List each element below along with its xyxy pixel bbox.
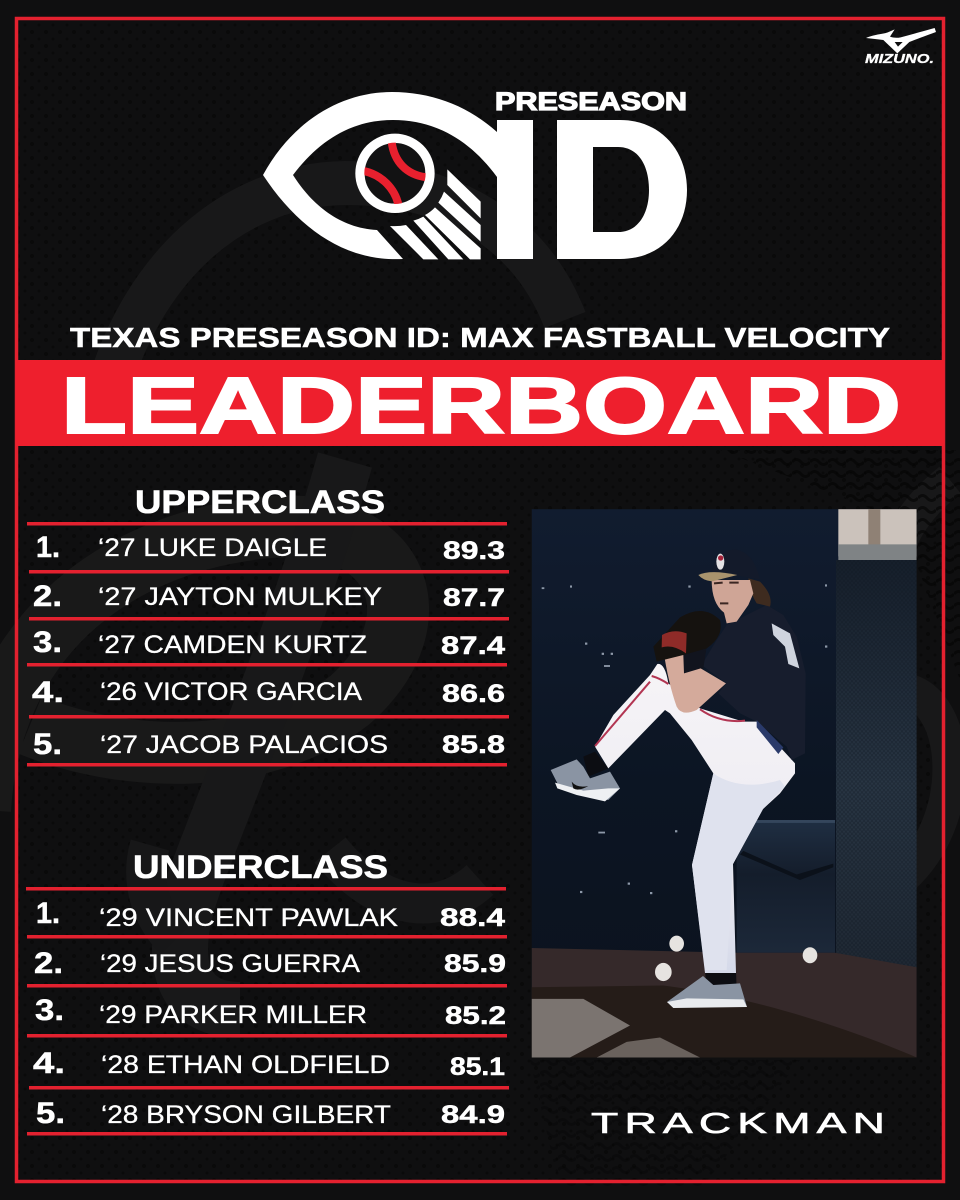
photo sky and fence [838, 509, 917, 560]
row 2 [33, 580, 505, 613]
row 1: 1. [36, 531, 60, 564]
row 3: ‘27 CAMDEN KURTZ [98, 631, 367, 659]
panel: underclass leaderboard [26, 849, 509, 1136]
row 2: 85.9 [444, 950, 506, 978]
player planted shoe [667, 976, 747, 1008]
row 5: ‘28 BRYSON GILBERT [101, 1101, 391, 1129]
icon: Mizuno logo [865, 28, 936, 66]
row 3: 3. [33, 626, 62, 659]
row 1 [36, 531, 505, 565]
player glove [653, 611, 721, 662]
player arm [663, 650, 726, 713]
row 1: 89.3 [443, 537, 505, 565]
row 3: 3. [35, 994, 64, 1027]
row 5: 84.9 [441, 1101, 505, 1129]
row 2: ‘29 JESUS GUERRA [100, 950, 360, 978]
row 4: ‘28 ETHAN OLDFIELD [101, 1051, 390, 1079]
row 2: 2. [34, 947, 63, 980]
photo side padding [836, 560, 917, 969]
player belt line [757, 720, 783, 754]
panel: upperclass leaderboard [27, 484, 509, 766]
player hair [748, 578, 771, 607]
player cap [698, 549, 760, 581]
photo: pitcher in leg-kick windup [532, 509, 917, 1057]
player [551, 549, 806, 1008]
row 1: ‘29 VINCENT PAWLAK [99, 904, 398, 932]
row 4: 4. [32, 676, 64, 709]
row 2 [34, 947, 506, 980]
player jersey [702, 605, 806, 760]
photo ground [532, 948, 917, 1057]
row 1 [36, 897, 505, 932]
row 5: 85.8 [442, 731, 505, 759]
row 2: ‘27 JAYTON MULKEY [98, 583, 382, 611]
logo eye shape [263, 92, 497, 259]
title banner [16, 360, 944, 450]
sponsor: Trackman: TRACKMAN [591, 1108, 891, 1140]
logo letter D [557, 120, 687, 259]
row 5 [33, 728, 505, 761]
row 4: 85.1 [450, 1053, 505, 1081]
player face [712, 580, 753, 623]
row 3 [35, 994, 506, 1030]
player pants [595, 664, 795, 973]
row 2: 2. [33, 580, 62, 613]
row 5: 5. [33, 728, 62, 761]
row 4 [33, 1047, 505, 1081]
photo bucket [737, 820, 835, 953]
photo backdrop wall [532, 509, 899, 953]
player socks [583, 752, 737, 991]
player raised shoe [551, 759, 620, 801]
row 2: 87.7 [443, 584, 505, 612]
player wristband [662, 631, 687, 653]
icon: Mizuno logo: MIZUNO. [865, 51, 934, 66]
title banner: LEADERBOARD [61, 361, 901, 450]
logo speed stripes [390, 169, 481, 259]
subtitle: TEXAS PRESEASON ID: MAX FASTBALL VELOCITY [70, 322, 890, 353]
row 3: 85.2 [445, 1002, 506, 1030]
row 5 [36, 1097, 505, 1130]
row 5: ‘27 JACOB PALACIOS [100, 731, 388, 759]
row 5: 5. [36, 1097, 65, 1130]
logo letter I [497, 120, 533, 259]
photo practice balls [655, 936, 817, 981]
row 3: 87.4 [441, 632, 505, 660]
row 4 [32, 676, 505, 709]
logo baseball [360, 138, 430, 208]
player pants shading [692, 773, 785, 970]
row 3: ‘29 PARKER MILLER [99, 1001, 367, 1029]
player pant piping [595, 676, 745, 746]
jersey number [772, 623, 799, 668]
logo: Preseason ID [263, 88, 687, 259]
row 1: 1. [36, 897, 60, 930]
player under-arm shadow [683, 647, 707, 675]
row 4: 86.6 [442, 680, 505, 708]
row 1: 88.4 [440, 904, 505, 932]
heading: upperclass: UPPERCLASS [135, 484, 385, 520]
logo wordmark: PRESEASON [495, 88, 687, 116]
row 4: ‘26 VICTOR GARCIA [100, 678, 362, 706]
row 1: ‘27 LUKE DAIGLE [98, 534, 327, 562]
heading: underclass: UNDERCLASS [133, 849, 388, 885]
row 3 [33, 626, 505, 660]
row 4: 4. [33, 1047, 65, 1080]
